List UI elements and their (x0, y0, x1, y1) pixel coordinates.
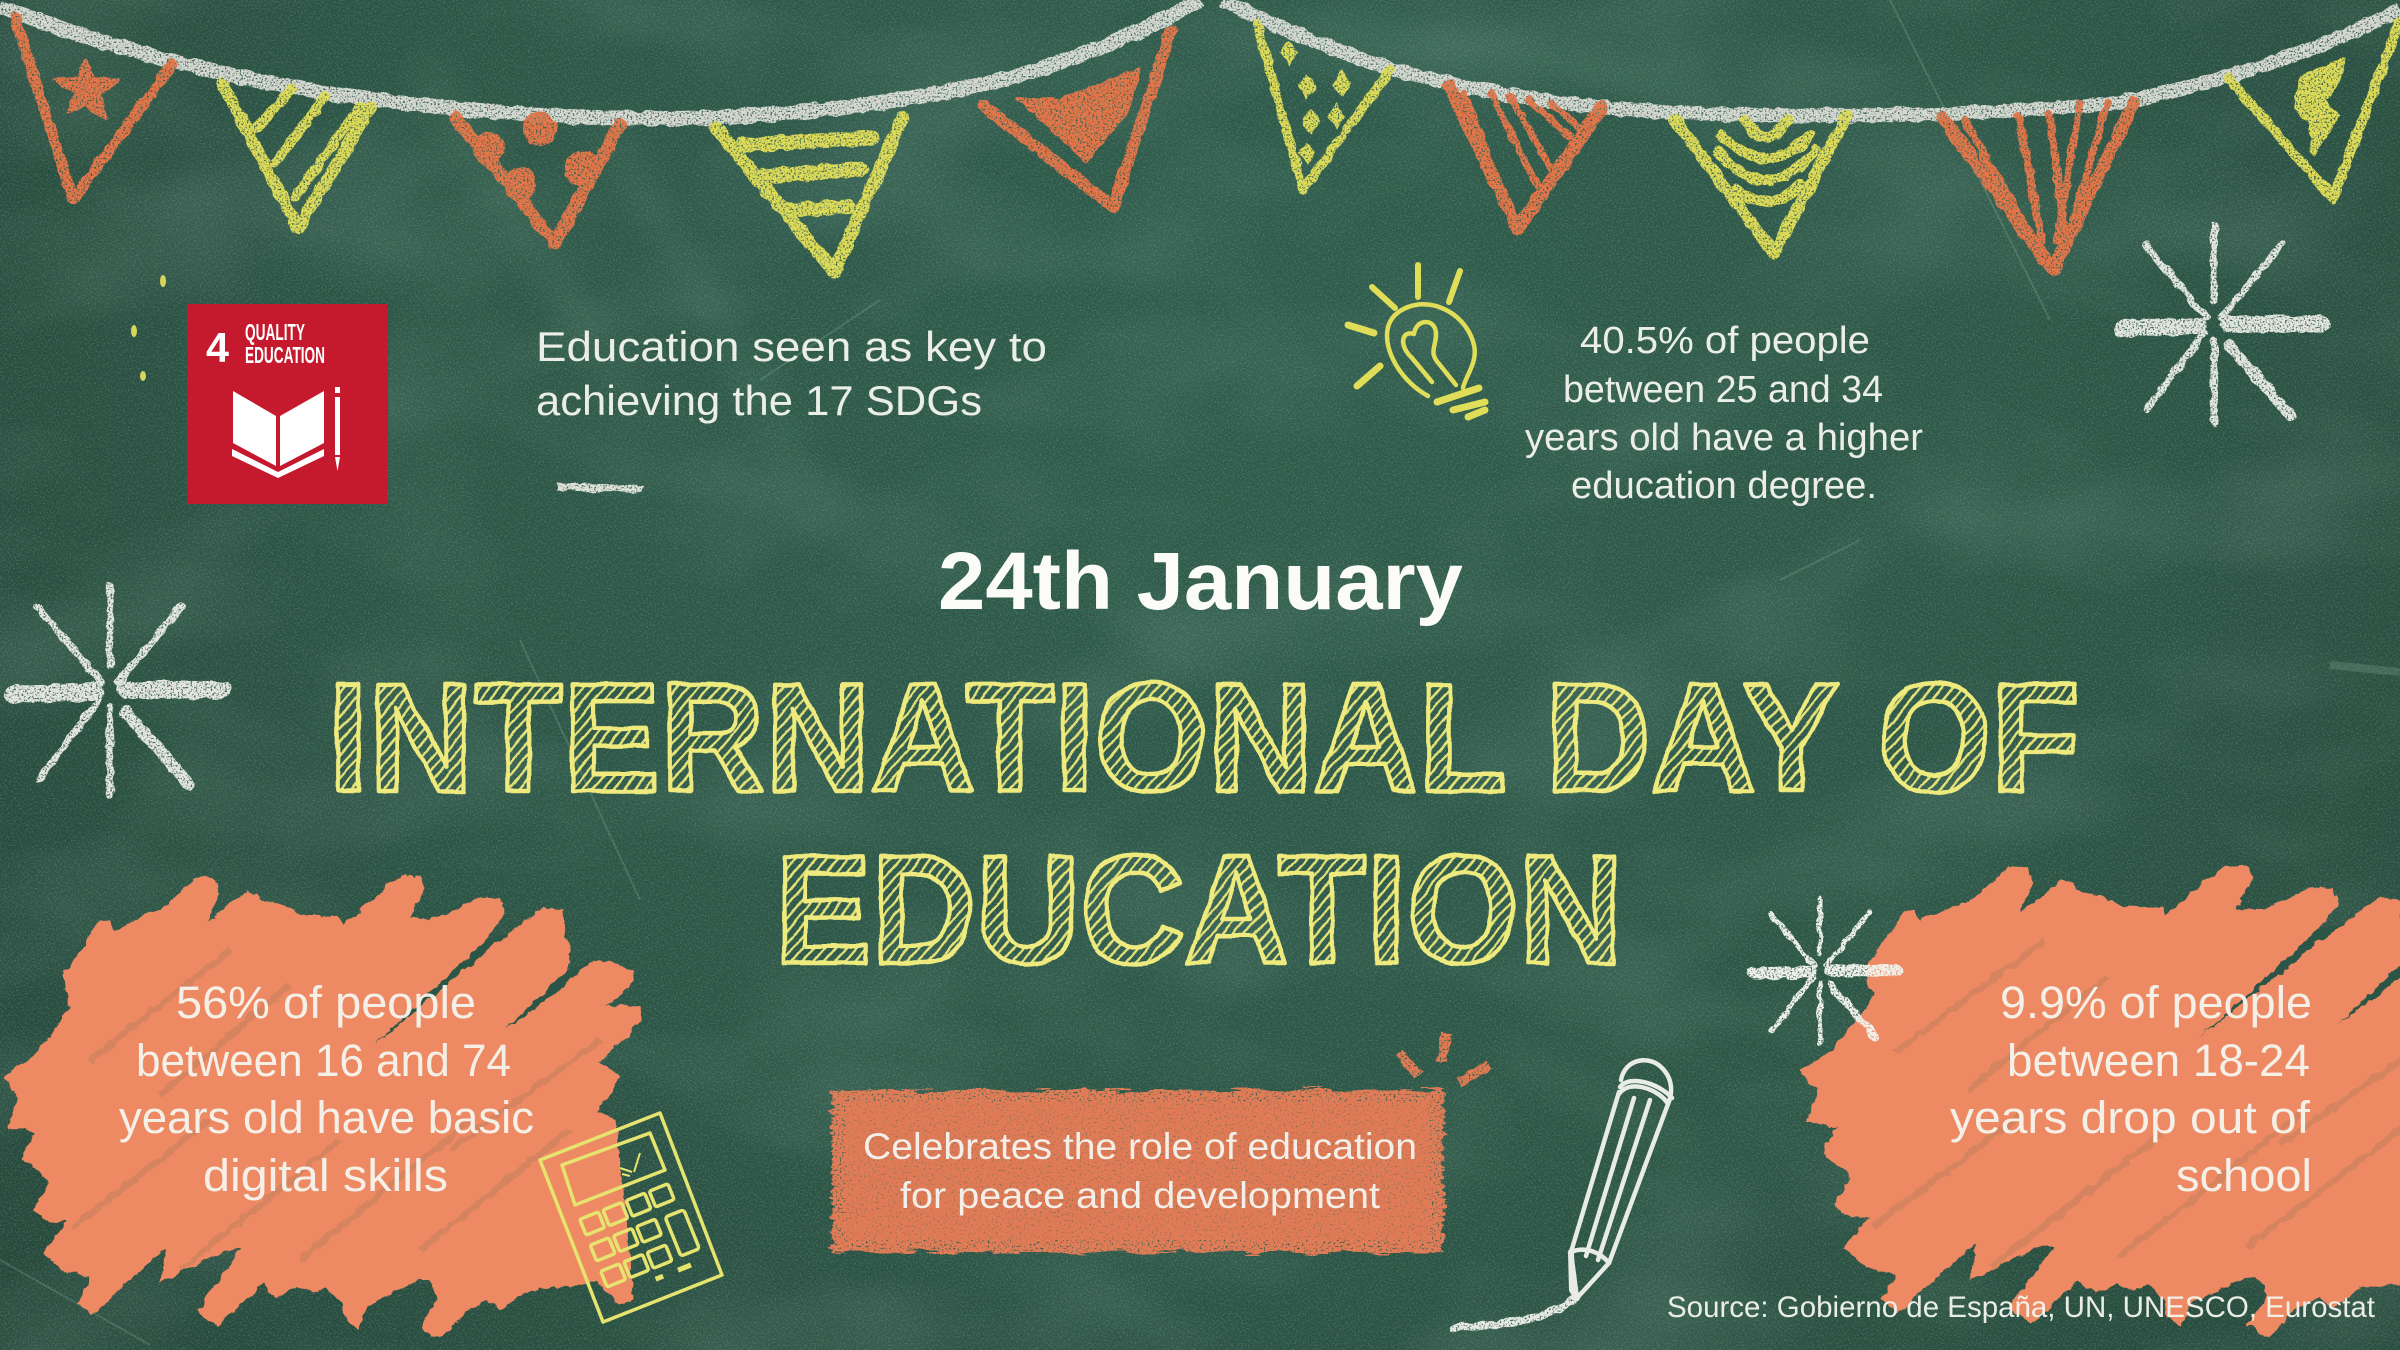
text: higher education stat: 40.5% of people (1580, 320, 1870, 362)
bunting string left (0, 0, 1200, 119)
text: digital skills stat: years old have basic (119, 1092, 534, 1143)
text: education key to SDGs: Education seen as key to (536, 323, 1047, 370)
SDG name (245, 319, 325, 368)
text: digital skills stat: between 16 and 74 (136, 1035, 511, 1086)
date heading: 24th January (938, 536, 1463, 627)
text: higher education stat: years old have a higher (1525, 417, 1923, 459)
text: drop out stat (1950, 977, 2312, 1201)
chalk star lower right (1754, 899, 1897, 1043)
flag 6 yellow diamonds (1257, 24, 1391, 190)
text: drop out stat: school (2176, 1150, 2312, 1201)
icon: calculator (540, 1113, 722, 1322)
text: drop out stat: 9.9% of people (2000, 977, 2312, 1028)
SDG name: EDUCATION (245, 342, 325, 368)
orange chalk scribble right (1800, 865, 2400, 1338)
icon: pencil (1452, 1060, 1672, 1328)
callout fill (846, 1102, 1430, 1240)
title: EDUCATION (775, 823, 1623, 996)
text: higher education stat: education degree. (1571, 465, 1877, 507)
SDG 4 logo (187, 304, 388, 504)
flag 3 orange scallops (455, 112, 620, 243)
text: digital skills stat: digital skills (203, 1150, 448, 1201)
flag 1 orange star (15, 17, 172, 200)
flag 8 yellow arcs (1674, 115, 1847, 253)
icon: light bulb (1348, 265, 1485, 417)
text: drop out stat: years drop out of (1950, 1092, 2311, 1143)
SDG book icon (232, 387, 340, 478)
flag 5 orange filled triangle (983, 31, 1171, 207)
bunting flags (15, 17, 2400, 272)
text: education key to SDGs (536, 323, 1047, 424)
text: digital skills stat (119, 977, 534, 1201)
chalk star left (13, 585, 222, 795)
callout text: for peace and development (900, 1175, 1381, 1216)
callout text: Celebrates the role of education (863, 1126, 1417, 1167)
title: INTERNATIONAL DAY OF (328, 651, 2080, 824)
SDG number: 4 (206, 324, 230, 371)
text: digital skills stat: 56% of people (176, 977, 476, 1028)
chalk dash (557, 487, 643, 489)
flag 7 orange stripes (1449, 86, 1602, 228)
text: education key to SDGs: achieving the 17 SDGs (536, 377, 982, 424)
flag 2 yellow stripes (222, 83, 371, 228)
gaps and streaks (70, 930, 600, 1270)
callout box (832, 1090, 1444, 1252)
flag 9 orange stripes (1942, 102, 2134, 270)
source note: Source: Gobierno de España, UN, UNESCO, Eurostat (1667, 1291, 2376, 1324)
bunting string right (1223, 0, 2400, 116)
flag 4 yellow bars (716, 117, 903, 272)
text: drop out stat: between 18-24 (2007, 1035, 2310, 1086)
chalk star top right (2122, 224, 2321, 424)
text: higher education stat: between 25 and 34 (1563, 369, 1883, 411)
orange chalk scribble left (2, 875, 642, 1340)
title (328, 651, 2080, 996)
text: higher education stat (1525, 320, 1923, 507)
flag 10 yellow lightning (2229, 21, 2400, 198)
callout text (863, 1126, 1417, 1216)
SDG name: QUALITY (245, 319, 305, 345)
orange spark marks (1399, 1033, 1489, 1082)
small yellow chalk marks (131, 275, 166, 381)
